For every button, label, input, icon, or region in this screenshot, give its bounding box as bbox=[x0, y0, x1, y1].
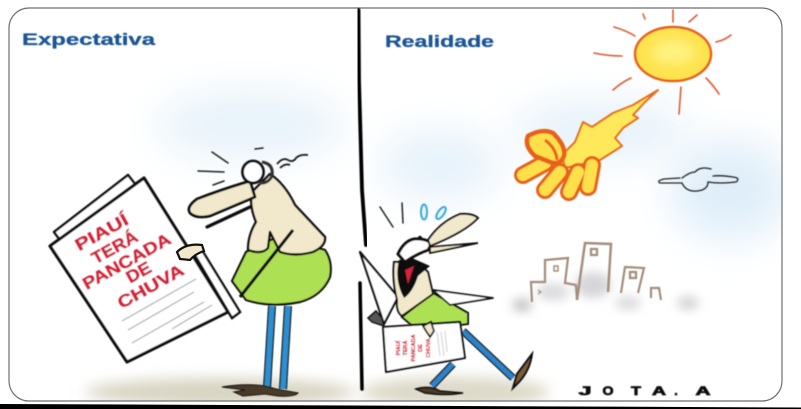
feet bbox=[513, 354, 532, 388]
fingers bbox=[523, 163, 592, 192]
small headline: PIAUÍ bbox=[394, 340, 402, 355]
character: shouting man (reality) bbox=[360, 203, 532, 394]
signature: JOTA. A bbox=[578, 384, 711, 398]
signature: JOTA. A: A bbox=[652, 384, 667, 398]
hand on wall bbox=[368, 311, 384, 326]
green shirt bbox=[402, 293, 468, 330]
hair squiggle bbox=[277, 155, 308, 168]
divider: panel separator line bbox=[358, 10, 366, 389]
small headline bbox=[394, 334, 432, 362]
skin: neck bbox=[393, 262, 433, 316]
icon: cloud bbox=[659, 168, 738, 191]
sweat drops bbox=[421, 204, 447, 220]
character: man reading newspaper (expectation) bbox=[189, 148, 331, 396]
headline bbox=[72, 209, 187, 313]
hand on small newspaper bbox=[423, 322, 434, 337]
article lines bbox=[122, 279, 212, 343]
legs bbox=[267, 306, 288, 389]
shock lines bbox=[380, 203, 403, 227]
small headline: TERÁ bbox=[402, 340, 409, 355]
small headline: DE bbox=[418, 344, 424, 352]
icon: fiery thumbs-up flame bbox=[523, 90, 658, 192]
skin: arm wing bbox=[433, 290, 493, 305]
headline: DE bbox=[123, 258, 155, 287]
headline: TERÁ bbox=[88, 227, 141, 268]
open mouth bbox=[397, 258, 430, 298]
legs bbox=[463, 331, 513, 378]
heading: Realidade: Realidade bbox=[385, 33, 494, 51]
small headline: PANCADA bbox=[411, 334, 417, 362]
small headline: CHUVA bbox=[426, 338, 432, 358]
green shirt bbox=[232, 237, 331, 305]
feet bbox=[222, 385, 298, 396]
surprise lines bbox=[198, 148, 263, 185]
glasses bbox=[242, 161, 264, 183]
headline: PANCADA bbox=[79, 229, 174, 294]
small newspaper bbox=[383, 322, 465, 372]
tail cone bbox=[360, 252, 398, 324]
headline: CHUVA bbox=[114, 261, 187, 313]
heading: Expectativa: Expectativa bbox=[22, 31, 156, 49]
signature: JOTA. A: J bbox=[578, 384, 592, 398]
flame bbox=[562, 90, 658, 168]
arm bbox=[240, 230, 293, 297]
upper beak bbox=[428, 214, 478, 246]
signature: JOTA. A: T bbox=[631, 384, 642, 398]
signature: JOTA. A: O bbox=[602, 384, 614, 398]
thumb bbox=[527, 131, 564, 163]
headline: PIAUÍ bbox=[72, 209, 133, 255]
head and eye bbox=[398, 239, 432, 262]
signature: JOTA. A: A bbox=[696, 384, 711, 398]
icon: sun with rays bbox=[594, 10, 731, 114]
signature: JOTA. A: . bbox=[674, 384, 678, 398]
bottom black edge bbox=[0, 404, 801, 409]
buildings bbox=[531, 243, 661, 302]
hand holding newspaper bbox=[177, 245, 204, 260]
background: sky and ground washes bbox=[85, 90, 790, 407]
lower beak bbox=[430, 243, 478, 253]
newspaper: PIAUÍ TERÁ PANCADA DE CHUVA bbox=[50, 175, 240, 362]
skin: neck and chest bbox=[248, 174, 325, 254]
nose and beak bbox=[189, 181, 255, 217]
small article lines bbox=[437, 331, 447, 356]
